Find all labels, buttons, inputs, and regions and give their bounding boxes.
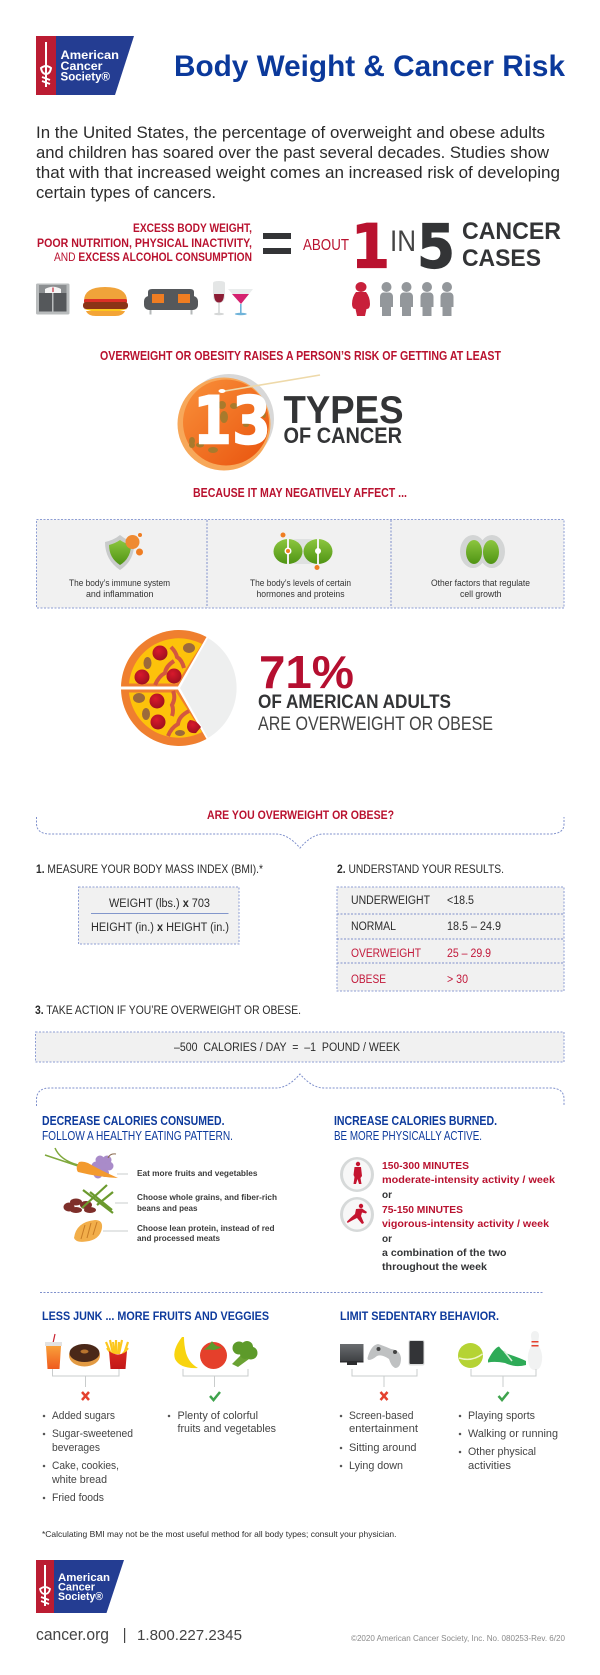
icon: fries (106, 1340, 128, 1369)
icon: carrot and grapes (45, 1148, 118, 1178)
icon: petri dish with 13 (178, 374, 320, 470)
icon: pizza with 71 percent of slices (121, 630, 237, 746)
statistic: 71 percent of American adults: ARE OVERWEIGHT OR OBESE (258, 714, 493, 735)
panel: affected body systems (36, 520, 564, 608)
BMI formula box: WEIGHT (lbs.) x 703 (109, 898, 210, 910)
list: sedentary behaviors: Sitting around (349, 1442, 416, 1454)
icon: smartphone (408, 1340, 424, 1366)
step 1 heading: 1. MEASURE YOUR BODY MASS INDEX (BMI).* (36, 862, 263, 876)
activity guidelines text: 150-300 MINUTES (382, 1161, 469, 1172)
footer logo: Cancer (58, 1582, 96, 1594)
intro text block: In the United States, the percentage of overweight and obese adults (36, 123, 545, 142)
panel item: hormones and proteins: The body’s levels of certain (250, 578, 351, 588)
list: junk foods: Sugar-sweetened (52, 1428, 133, 1440)
icon: bathroom scale (36, 284, 70, 314)
icon: tomato (200, 1341, 227, 1369)
panel item: cell growth: Other factors that regulate (431, 578, 530, 588)
panel item: immune system: and inflammation (86, 589, 154, 599)
footnote: *Calculating BMI may not be the most useful method for all body types; consult your physician. (42, 1529, 396, 1539)
eating tips list: Eat more fruits and vegetables (137, 1168, 258, 1178)
footer contact: cancer.org (36, 1625, 109, 1644)
statistic: 71 percent of American adults (258, 646, 493, 735)
activity guidelines text: or (382, 1234, 392, 1245)
list: junk foods: Cake, cookies, (52, 1460, 119, 1472)
statistic: about 1 in 5 cancer cases: IN (390, 225, 416, 258)
statistic: about 1 in 5 cancer cases: CANCER (462, 218, 561, 245)
brace: up (36, 1074, 564, 1106)
BMI formula box: HEIGHT (in.) x HEIGHT (in.) (91, 922, 229, 934)
icon: donut (69, 1344, 100, 1366)
logo: American Cancer Society: Society® (60, 70, 110, 84)
activity guidelines text: vigorous-intensity activity / week (382, 1219, 549, 1230)
activity guidelines text (382, 1161, 555, 1273)
icon: television (340, 1344, 364, 1365)
heading: less junk more fruits and veggies: LESS JUNK ... MORE FRUITS AND VEGGIES (42, 1309, 269, 1323)
icon: petri dish with 13: 13 (193, 382, 271, 460)
statistic: about 1 in 5 cancer cases: 5 (417, 212, 455, 282)
brace: down (36, 817, 564, 848)
icon: wine and martini glasses (213, 281, 253, 315)
icon: chicken breast (74, 1220, 102, 1242)
BMI results table: 18.5 – 24.9 (447, 921, 501, 933)
activity guidelines text: throughout the week (382, 1262, 487, 1273)
step 2 heading: 2. UNDERSTAND YOUR RESULTS. (337, 862, 504, 876)
eating tips list (103, 1168, 277, 1243)
BMI results table: OVERWEIGHT (351, 948, 421, 960)
BMI results table: > 30 (447, 974, 468, 986)
list: healthy foods (169, 1410, 276, 1435)
BMI results table: OBESE (351, 974, 386, 986)
icon: bowling pin (528, 1331, 542, 1370)
list: junk foods: Fried foods (52, 1492, 104, 1504)
activity guidelines text: a combination of the two (382, 1248, 506, 1259)
BMI results table (337, 887, 564, 991)
heading: risk of at least: OVERWEIGHT OR OBESITY RAISES A PERSON’S RISK OF GETTING AT LEAST (100, 349, 501, 363)
list: junk foods (44, 1410, 133, 1504)
icon: beans and peas (64, 1185, 113, 1213)
statistic: about 1 in 5 cancer cases: 1 (351, 212, 390, 282)
icon: banana (174, 1337, 198, 1368)
icon: clock with running figure (340, 1197, 374, 1232)
panel item: immune system: The body’s immune system (69, 578, 170, 588)
heading: increase calories burned: INCREASE CALORIES BURNED. (334, 1114, 497, 1128)
title: Body Weight & Cancer Risk (174, 50, 565, 83)
equals sign (263, 233, 291, 254)
list: junk foods: beverages (52, 1442, 100, 1454)
bracket: junk food to cross (52, 1369, 119, 1400)
list: junk foods: Added sugars (52, 1410, 115, 1422)
icon: sofa (144, 289, 198, 314)
logo: American Cancer Society: Cancer (60, 59, 103, 73)
list: sedentary behaviors: entertainment (349, 1423, 418, 1435)
logo: American Cancer Society (36, 36, 134, 95)
heading: decrease calories consumed: DECREASE CALORIES CONSUMED. (42, 1114, 224, 1128)
panel item: hormones and proteins (250, 532, 351, 599)
bracket: screens to cross (352, 1369, 417, 1400)
list: sedentary behaviors: Screen-based (349, 1410, 414, 1422)
risk factors text: POOR NUTRITION, PHYSICAL INACTIVITY, (37, 238, 252, 250)
panel item: immune system (69, 533, 170, 599)
heading: 13 types of cancer: OF CANCER (284, 423, 402, 448)
risk factors text (37, 223, 252, 264)
footer logo (36, 1560, 124, 1613)
icon: burger (83, 287, 128, 316)
icon: broccoli (232, 1341, 258, 1367)
list: physical activities: activities (468, 1460, 512, 1472)
statistic: about 1 in 5 cancer cases: CASES (462, 245, 541, 272)
icon row: one in five people (352, 282, 454, 316)
eating tips list: Choose lean protein, instead of red (137, 1223, 274, 1233)
intro text block: certain types of cancers. (36, 183, 216, 202)
eating tips list: beans and peas (137, 1203, 198, 1213)
heading: are you overweight or obese: ARE YOU OVERWEIGHT OR OBESE? (207, 810, 394, 822)
BMI results table: UNDERWEIGHT (351, 895, 430, 907)
icon: running shoe (488, 1346, 526, 1366)
calorie equation box: –500 CALORIES / DAY = –1 POUND / WEEK (174, 1042, 400, 1054)
panel item: cell growth: cell growth (460, 589, 502, 599)
BMI formula box (78, 887, 239, 944)
icon: tennis ball (458, 1343, 483, 1368)
eating tips list: and processed meats (137, 1233, 220, 1243)
logo: American Cancer Society: American (60, 48, 119, 62)
icon: clock with walking figure (340, 1157, 374, 1192)
heading: because it may negatively affect: BECAUSE IT MAY NEGATIVELY AFFECT ... (193, 486, 407, 500)
bracket: fruit and veg to check (183, 1369, 248, 1400)
list: sedentary behaviors (341, 1410, 418, 1472)
step 3 heading: 3. TAKE ACTION IF YOU’RE OVERWEIGHT OR OBESE. (35, 1003, 301, 1017)
list: sedentary behaviors: Lying down (349, 1460, 403, 1472)
panel item: hormones and proteins: hormones and proteins (256, 589, 345, 599)
statistic: about 1 in 5 cancer cases: ABOUT (303, 237, 349, 254)
statistic: 71 percent of American adults: OF AMERICAN ADULTS (258, 692, 451, 713)
BMI results table: NORMAL (351, 921, 397, 933)
activity guidelines text: 75-150 MINUTES (382, 1205, 463, 1216)
activity guidelines text: or (382, 1190, 392, 1201)
list: physical activities: Playing sports (468, 1410, 535, 1422)
statistic: about 1 in 5 cancer cases (303, 212, 561, 282)
heading: increase calories burned (334, 1114, 497, 1143)
heading: limit sedentary behavior: LIMIT SEDENTARY BEHAVIOR. (340, 1309, 499, 1323)
heading: decrease calories consumed (42, 1114, 233, 1143)
list: junk foods: white bread (51, 1474, 107, 1486)
heading: increase calories burned: BE MORE PHYSICALLY ACTIVE. (334, 1129, 482, 1143)
activity guidelines text: moderate-intensity activity / week (382, 1175, 555, 1186)
calorie equation box (36, 1032, 564, 1062)
heading: 13 types of cancer: TYPES (284, 389, 404, 432)
footer logo: Society® (58, 1591, 103, 1603)
risk factors text: EXCESS BODY WEIGHT, (133, 223, 252, 235)
bracket: activities to check (471, 1369, 536, 1400)
footer contact: 1.800.227.2345 (137, 1627, 242, 1644)
icon: soda cup (45, 1334, 62, 1369)
BMI results table: <18.5 (447, 895, 474, 907)
footer contact (36, 1625, 242, 1644)
icon: game controller (368, 1344, 401, 1368)
list: physical activities: Other physical (468, 1446, 536, 1458)
intro text block: and children has soared over the past several decades. Studies show (36, 143, 550, 162)
heading: decrease calories consumed: FOLLOW A HEALTHY EATING PATTERN. (42, 1129, 233, 1143)
list: healthy foods: fruits and vegetables (178, 1423, 276, 1435)
heading: 13 types of cancer (284, 389, 404, 448)
list: healthy foods: Plenty of colorful (178, 1410, 258, 1422)
footer logo: American (58, 1572, 110, 1584)
BMI results table: 25 – 29.9 (447, 948, 491, 960)
copyright: ©2020 American Cancer Society, Inc. No. 080253-Rev. 6/20 (351, 1634, 566, 1643)
statistic: 71 percent of American adults: 71% (259, 646, 354, 698)
risk factors text: AND EXCESS ALCOHOL CONSUMPTION (54, 252, 252, 264)
eating tips list: Choose whole grains, and fiber-rich (137, 1192, 277, 1202)
panel item: cell growth (431, 535, 530, 599)
list: physical activities: Walking or running (468, 1428, 558, 1440)
intro text block: that with that increased weight comes an increased risk of developing (36, 163, 560, 182)
intro text block (36, 123, 560, 202)
list: physical activities (460, 1410, 558, 1472)
